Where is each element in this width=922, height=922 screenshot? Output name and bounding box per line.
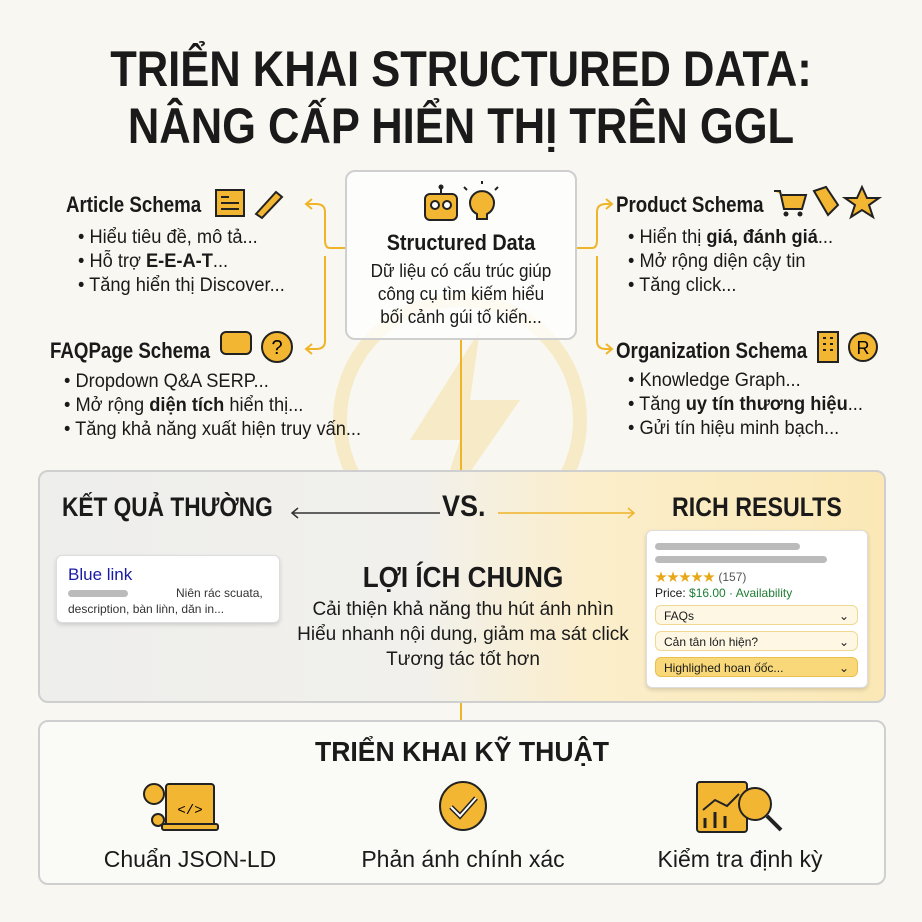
rich result card: [646, 530, 868, 688]
benefits text: Tương tác tốt hơn: [386, 649, 540, 670]
panel: faqpage schema: FAQPage Schema: [50, 338, 210, 363]
rich result card: ★★★★★ (157): [655, 570, 746, 584]
rich result card: Cản tân lón hiện?: [664, 635, 758, 649]
benefits text: Cải thiện khả năng thu hút ánh nhìn: [312, 599, 614, 620]
panel: product schema: • Mở rộng diện cậy tin: [628, 251, 806, 272]
rich result card: Highlighed hoan ốốc...: [664, 661, 783, 675]
blue link card: description, bàn liǹn, dăn in...: [68, 602, 224, 616]
item: periodic check: Kiểm tra định kỳ: [658, 846, 822, 872]
watermark: [325, 293, 595, 605]
benefits text: Hiểu nhanh nội dung, giảm ma sát click: [297, 624, 629, 645]
watermark: LIGHT: [325, 505, 595, 605]
panel: organization schema: • Tăng uy tín thương hiệu...: [628, 394, 863, 415]
rich result card: FAQs: [664, 609, 694, 623]
arrow: left: [290, 508, 440, 518]
panel: organization schema: • Gửi tín hiệu minh bạch...: [628, 418, 839, 439]
item: accuracy: [361, 781, 565, 872]
icon: robot and bulb: [424, 181, 499, 221]
panel: organization schema: Organization Schema: [616, 338, 807, 363]
panel: product schema: Product Schema: [616, 192, 764, 217]
rich result card: ⌄: [839, 609, 849, 623]
panel: article schema: • Tăng hiển thị Discover...: [78, 275, 285, 296]
item: accuracy: Phản ánh chính xác: [361, 846, 565, 872]
heading: rich results: RICH RESULTS: [672, 492, 842, 522]
panel: article schema: • Hiểu tiêu đề, mô tả...: [78, 227, 258, 248]
icon: article pen: [215, 189, 284, 220]
rich result card: ⌄: [839, 635, 849, 649]
central box: structured data: Structured Data: [387, 230, 535, 255]
icon: chat question: ?: [271, 337, 283, 359]
panel: faqpage schema: • Tăng khả năng xuất hiện truy vấn...: [64, 419, 361, 440]
blue link card: Blue link: [68, 565, 132, 584]
panel: article schema: [66, 189, 285, 296]
central box: structured data: [345, 170, 577, 340]
icon: cart tag star: [774, 184, 882, 220]
rich result card: ⌄: [839, 661, 849, 675]
title: TRIỂN KHAI STRUCTURED DATA:: [110, 41, 812, 97]
central box: structured data: Dữ liệu có cấu trúc giúp: [371, 261, 551, 281]
blue link card: [56, 555, 280, 623]
heading: TRIỂN KHAI KỸ THUẬT: [315, 736, 609, 767]
icon: building registered: [817, 331, 878, 363]
panel: product schema: [616, 184, 882, 296]
panel: product schema: • Hiển thị giá, đánh giá...: [628, 227, 833, 248]
item: json-ld: </>: [177, 803, 203, 819]
panel: comparison: [38, 470, 886, 703]
panel: organization schema: [616, 331, 878, 439]
panel: organization schema: • Knowledge Graph...: [628, 370, 801, 391]
panel: faqpage schema: • Dropdown Q&A SERP...: [64, 371, 269, 392]
panel: faqpage schema: • Mở rộng diện tích hiển thị...: [64, 395, 303, 416]
central box: structured data: bối cảnh gúi tố kiến...: [380, 307, 542, 327]
item: periodic check: [658, 781, 822, 872]
panel: product schema: • Tăng click...: [628, 275, 736, 296]
benefits text: [297, 562, 629, 670]
benefits text: LỢI ÍCH CHUNG: [363, 562, 563, 594]
title: NÂNG CẤP HIỂN THỊ TRÊN GGL: [128, 98, 794, 154]
vs label: VS.: [442, 490, 486, 523]
panel: article schema: • Hỗ trợ E-E-A-T...: [78, 251, 228, 272]
icon: building registered: R: [856, 338, 870, 358]
panel: article schema: Article Schema: [66, 192, 201, 217]
heading: ket qua thuong: KẾT QUẢ THƯỜNG: [62, 492, 273, 522]
blue link card: Niên rác scuata,: [176, 586, 263, 600]
panel: technical implementation: [38, 720, 886, 885]
item: json-ld: Chuẩn JSON-LD: [104, 846, 276, 872]
central box: structured data: công cụ tìm kiếm hiểu: [378, 284, 544, 304]
rich result card: Price: $16.00 · Availability: [655, 586, 792, 600]
title: [110, 41, 812, 154]
item: json-ld: [104, 783, 276, 872]
arrow: right: [498, 508, 635, 518]
panel: faqpage schema: [50, 331, 361, 440]
icon: chat question: [220, 331, 293, 363]
